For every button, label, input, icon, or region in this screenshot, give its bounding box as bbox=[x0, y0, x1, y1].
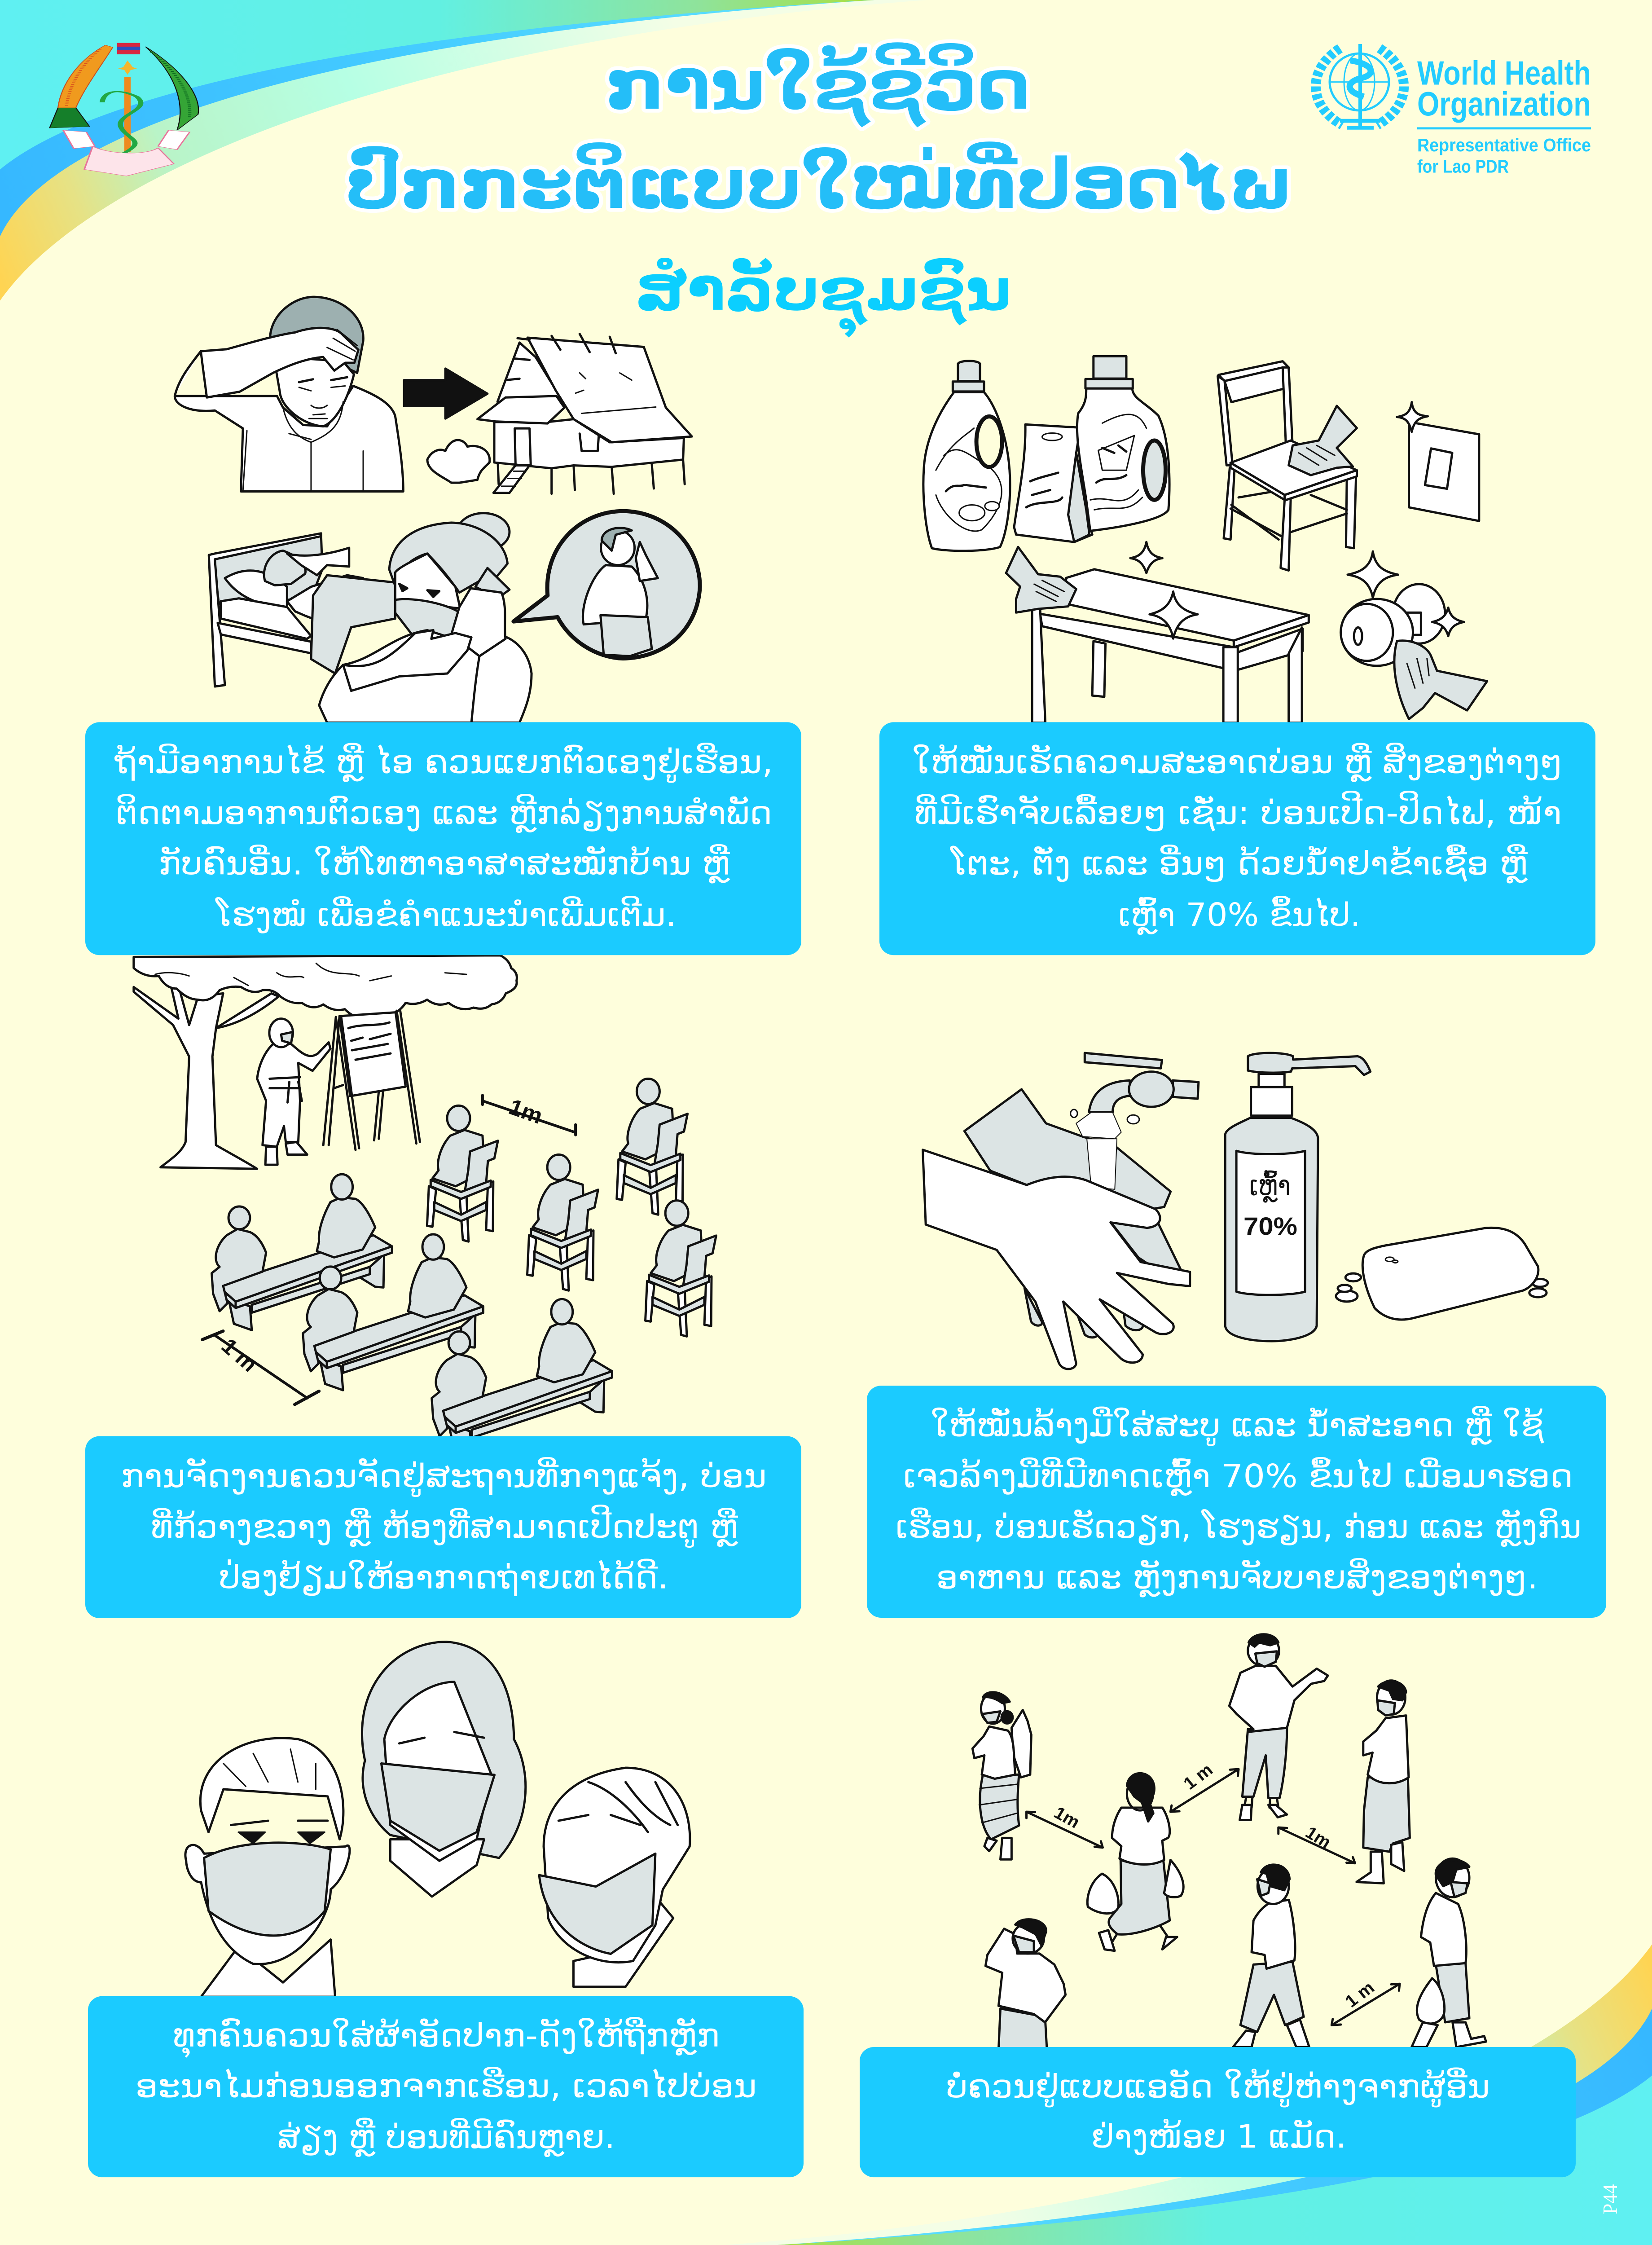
page code: P44 bbox=[1599, 2184, 1621, 2214]
panel: self isolation text: ຕິດຕາມອາການຕົວເອງ ແລະ ຫຼີກລ່ຽງການສຳພັດ bbox=[116, 793, 772, 833]
man with bag bbox=[1412, 1858, 1486, 2047]
man with arms crossed bbox=[1357, 1681, 1410, 1884]
panel: hand washing text: ເຮືອນ, ບ່ອນເຮັດວຽກ, ໂຮງຮຽນ, ກ່ອນ ແລະ ຫຼັງກິນ bbox=[896, 1507, 1582, 1547]
panel: cleaning text: ໃຫ້ໝັ່ນເຮັດຄວາມສະອາດບ່ອນ ຫຼື ສິ່ງຂອງຕ່າງໆ bbox=[912, 742, 1563, 782]
sanitizer bottle bbox=[1225, 1053, 1371, 1341]
illustration: sick man and house bbox=[175, 297, 692, 494]
subtitle: ສໍາລັບຊຸມຊົນ bbox=[635, 256, 1011, 338]
door knob bbox=[1341, 584, 1464, 666]
man in pants, top bbox=[1229, 1634, 1328, 1820]
distance arrows bbox=[1027, 1769, 1400, 2025]
panel: hand washing text: ເຈວລ້າງມືທີ່ມີທາດເຫຼົ້າ 70% ຂຶ້ນໄປ ເມື່ອມາຮອດ bbox=[903, 1457, 1573, 1496]
presenter bbox=[257, 1019, 330, 1165]
panel: hand washing text: ໃຫ້ໝັ່ນລ້າງມືໃສ່ສະບູ ແລະ ນໍ້າສະອາດ ຫຼື ໃຊ້ bbox=[931, 1406, 1544, 1446]
label: 1 m top: 1m bbox=[505, 1094, 546, 1129]
text: World Health Organization: Representative Office bbox=[1417, 135, 1591, 155]
panel: outdoor events text: ການຈັດງານຄວນຈັດຢູ່ສະຖານທີ່ກາງແຈ້ງ, ບ່ອນ bbox=[121, 1457, 767, 1497]
title bbox=[346, 42, 1294, 338]
logo: Lao health emblem bbox=[49, 43, 198, 176]
panel: outdoor events text bbox=[85, 1436, 801, 1618]
text: World Health Organization: for Lao PDR bbox=[1417, 156, 1509, 176]
front hand bbox=[923, 1150, 1190, 1369]
chair bbox=[1218, 361, 1357, 571]
bed bbox=[209, 533, 363, 687]
shrub bbox=[427, 440, 490, 483]
panel: mask wearing text bbox=[88, 1996, 804, 2177]
detergent package bbox=[1014, 424, 1092, 542]
panel: distancing text: ບໍ່ຄວນຢູ່ແບບແອອັດ ໃຫ້ຢູ່ຫ່າງຈາກຜູ້ອື່ນ bbox=[946, 2067, 1490, 2107]
arrow bbox=[404, 369, 488, 418]
icon: WHO emblem bbox=[1316, 44, 1404, 129]
panel: self isolation text: ໂຮງໝໍ ເພື່ອຂໍຄຳແນະນຳເພີ່ມເຕີມ. bbox=[215, 896, 677, 934]
man adjusting mask bbox=[985, 1919, 1066, 2050]
bottle label text: 70% bbox=[1243, 1213, 1297, 1241]
illustration: outdoor meeting with spacing bbox=[134, 955, 716, 1455]
1 metre marker: top bbox=[483, 1095, 576, 1135]
man with mask, left bbox=[185, 1738, 350, 1997]
hand wiping chair bbox=[1289, 406, 1357, 475]
panel: self isolation text: ກັບຄົນອື່ນ. ໃຫ້ໂທຫາອາສາສະໝັກບ້ານ ຫຼື bbox=[158, 844, 730, 883]
house on stilts bbox=[478, 334, 692, 494]
soap bar bbox=[1336, 1228, 1548, 1320]
hand wiping knob bbox=[1394, 641, 1487, 719]
illustration: physical distancing group bbox=[972, 1634, 1486, 2050]
labels: 1 m distance: 1m bbox=[1050, 1803, 1083, 1832]
bottle: jug bbox=[1077, 357, 1169, 531]
panel: cleaning text: ທີ່ມີເຮົາຈັບເລື້ອຍໆ ເຊັ່ນ: ບ່ອນເປີດ-ປິດໄຟ, ໜ້າ bbox=[914, 790, 1562, 832]
panel: cleaning text: ໂຕະ, ຕັ່ງ ແລະ ອື່ນໆ ດ້ວຍນ້ຳຢາຂ້າເຊື້ອ ຫຼື bbox=[950, 844, 1528, 883]
panel: mask wearing text: ສ່ຽງ ຫຼື ບ່ອນທີ່ມີຄົນຫຼາຍ. bbox=[277, 2117, 615, 2157]
woman with mask bbox=[311, 513, 532, 722]
seated people on chairs bbox=[427, 1079, 716, 1336]
illustration: caregiver on phone bbox=[209, 511, 700, 722]
labels: 1 m distance: 1 m bbox=[1180, 1760, 1217, 1793]
panel: hand washing text: ອາຫານ ແລະ ຫຼັງການຈັບບາຍສິ່ງຂອງຕ່າງໆ. bbox=[936, 1558, 1538, 1597]
title line 2: ປົກກະຕິແບບໃໝ່ທີ່ປອດໄພ bbox=[346, 141, 1294, 224]
panel: mask wearing text: ອະນາໄມກ່ອນອອກຈາກເຮືອນ, ເວລາໄປບ່ອນ bbox=[136, 2066, 757, 2105]
light switch bbox=[1409, 422, 1479, 521]
sparkles bbox=[1130, 542, 1398, 638]
flip chart bbox=[323, 1011, 420, 1150]
panel: cleaning text: ເຫຼົ້າ 70% ຂຶ້ນໄປ. bbox=[1118, 895, 1361, 934]
back hand bbox=[964, 1089, 1182, 1277]
text: World Health Organization: Organization bbox=[1417, 86, 1591, 123]
panel: hand washing text bbox=[867, 1386, 1606, 1618]
bottle: softener bbox=[923, 361, 1010, 551]
decorative swoosh: bottom right bbox=[725, 1944, 1652, 2245]
woman with mask, centre bbox=[362, 1642, 526, 1897]
sparkle bbox=[1397, 402, 1428, 432]
panel: self isolation text: ຖ້າມີອາການໄຂ້ ຫຼື ໄອ ຄວນແຍກຕົວເອງຢູ່ເຮືອນ, bbox=[114, 743, 773, 783]
man with fever bbox=[175, 297, 403, 491]
label: 1 m left: 1 m bbox=[216, 1334, 262, 1377]
labels: 1 m distance: 1m bbox=[1302, 1822, 1335, 1852]
panel: outdoor events text: ປ່ອງຢ້ຽມໃຫ້ອາກາດຖ່າຍເທໄດ້ດີ. bbox=[219, 1558, 668, 1596]
decorative swoosh: top left bbox=[0, 0, 927, 301]
illustration: hand washing bbox=[923, 1053, 1548, 1369]
panel: outdoor events text: ທີ່ກ້ວາງຂວາງ ຫຼື ຫ້ອງທີ່ສາມາດເປີດປະຕູ ຫຼື bbox=[151, 1504, 738, 1548]
logo: WHO bbox=[1316, 44, 1591, 176]
bottle label text bbox=[1243, 1170, 1297, 1241]
table bbox=[1032, 569, 1309, 723]
tree bbox=[134, 955, 517, 1169]
title line 1: ການໃຊ້ຊີວິດ bbox=[606, 42, 1030, 127]
man walking bbox=[1233, 1865, 1309, 2047]
1 metre marker: left bbox=[202, 1331, 319, 1404]
bottle label text: ເຫຼົ້າ bbox=[1249, 1170, 1291, 1202]
panel: self isolation text bbox=[85, 722, 801, 955]
panel: distancing text: ຢ່າງໜ້ອຍ 1 ແມັດ. bbox=[1091, 2118, 1346, 2155]
labels: 1 m distance: 1 m bbox=[1341, 1978, 1378, 2011]
text: World Health Organization: World Health bbox=[1417, 55, 1591, 92]
woman with bags bbox=[1087, 1773, 1183, 1951]
text: World Health Organization bbox=[1417, 55, 1591, 176]
panel: mask wearing text: ທຸກຄົນຄວນໃສ່ຜ້າອັດປາກ-ດັງໃຫ້ຖືກຫຼັກ bbox=[173, 2016, 720, 2058]
water bbox=[1076, 1112, 1121, 1189]
panel: cleaning text bbox=[879, 722, 1595, 955]
speech bubble with man bbox=[514, 511, 700, 659]
hand wiping table bbox=[1006, 547, 1076, 612]
illustration: people wearing masks bbox=[185, 1642, 690, 1997]
woman with basket bbox=[972, 1692, 1031, 1859]
man with mask, right bbox=[539, 1768, 690, 1987]
seated people on benches bbox=[212, 1174, 612, 1455]
labels: 1 m distance bbox=[1050, 1760, 1378, 2011]
illustration: cleaning products and surfaces bbox=[923, 357, 1487, 723]
faucet bbox=[1071, 1053, 1199, 1124]
panel: distancing text bbox=[860, 2047, 1576, 2177]
